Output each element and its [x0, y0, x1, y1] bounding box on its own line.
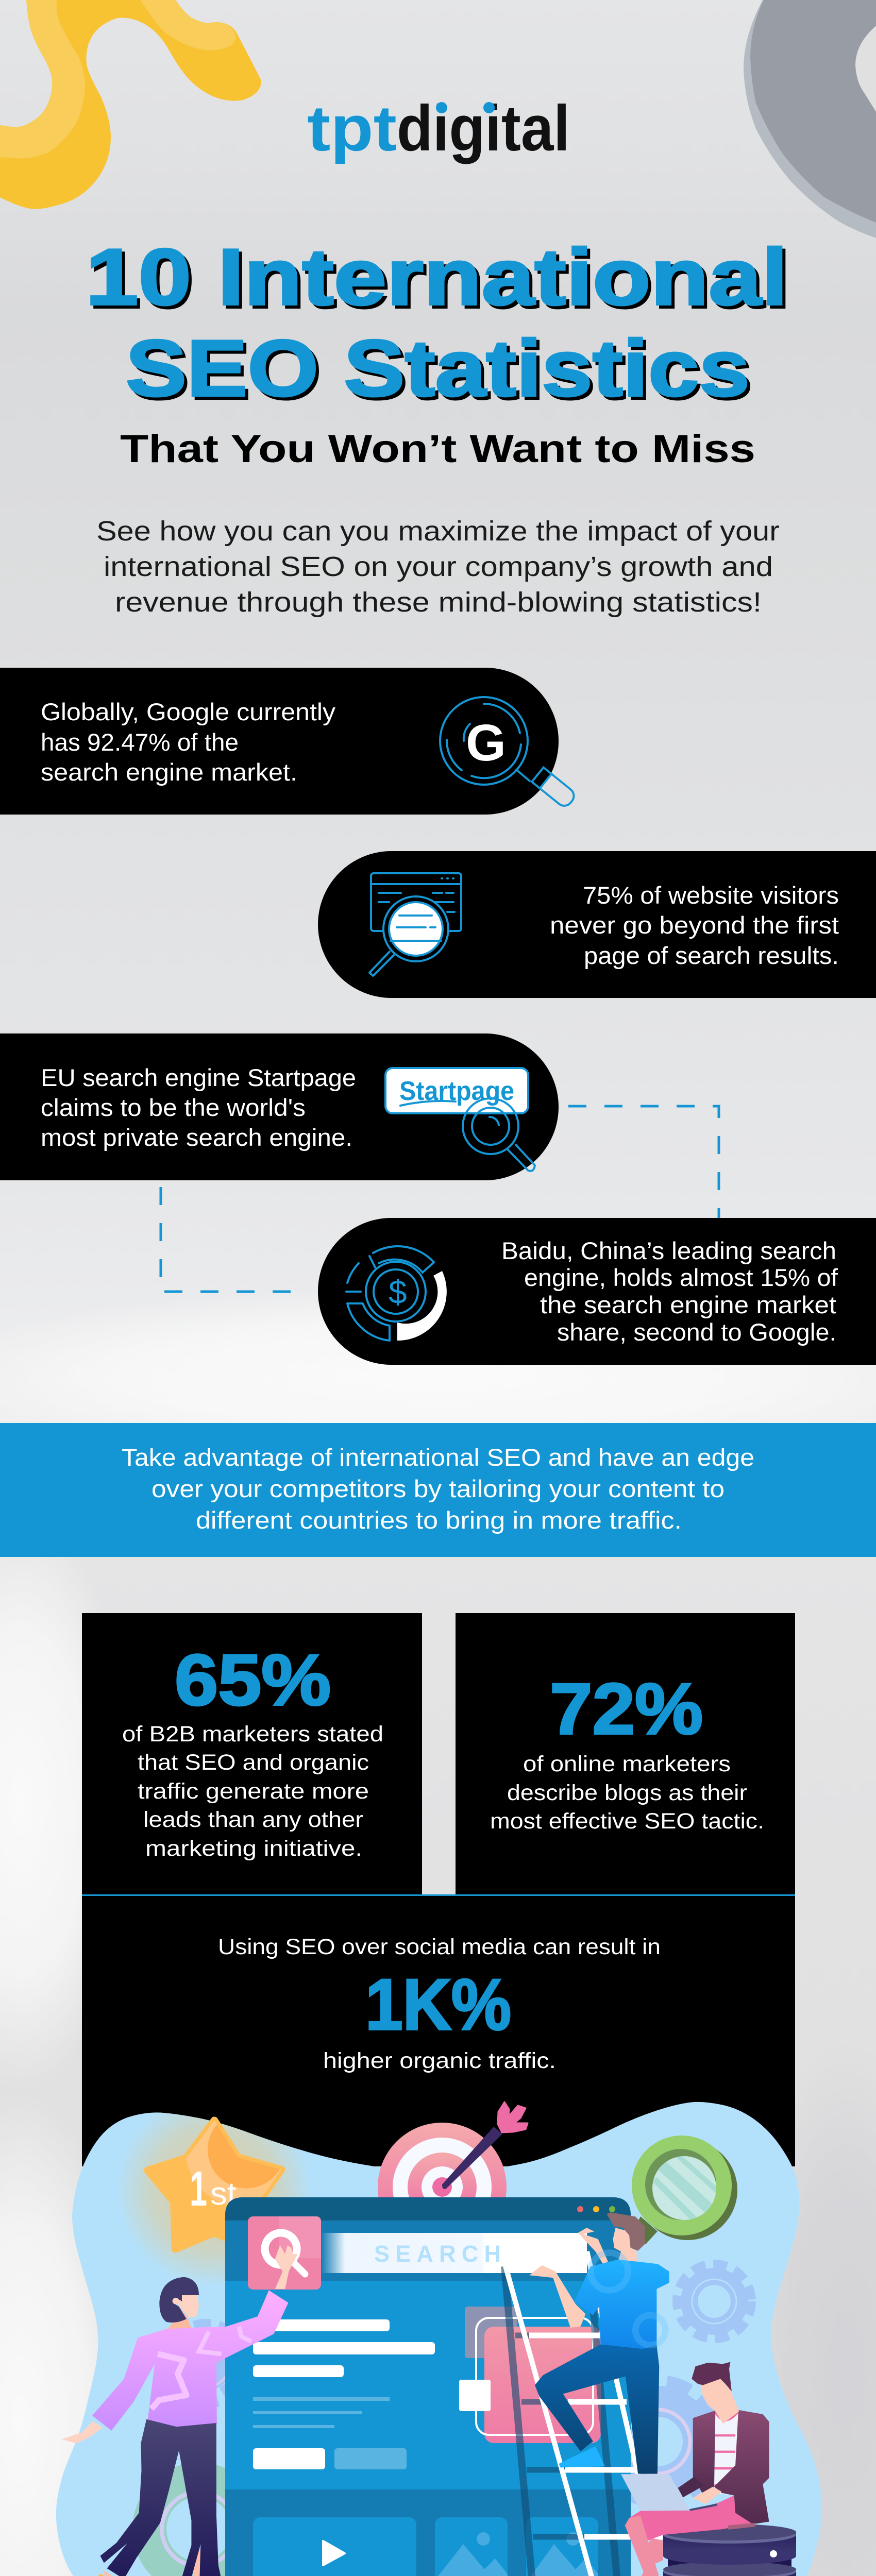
- text: Startpage stat: EU search engine Startpage: [41, 1064, 356, 1091]
- intro paragraph: See how you can you maximize the impact of your: [96, 516, 780, 547]
- blue banner: take advantage: over your competitors by tailoring your content to: [151, 1475, 725, 1502]
- title: SEO Statistics: [126, 324, 750, 413]
- star glow and star: [121, 2113, 307, 2282]
- search button: [248, 2216, 321, 2290]
- text: Google stat: [41, 698, 336, 786]
- text: 1st: st: [210, 2176, 237, 2212]
- subtitle: That You Won’t Want to Miss: [120, 427, 755, 471]
- logo: tptdigital: tpt: [307, 93, 397, 164]
- text: using SEO over social media: Using SEO over social media can result in: [218, 1935, 661, 1959]
- text: Baidu stat: the search engine market: [540, 1291, 836, 1318]
- text: Google stat: search engine market.: [41, 758, 297, 786]
- title: 10 International: [86, 232, 788, 321]
- text: Startpage stat: [41, 1064, 356, 1151]
- dashed connector left: [161, 1187, 309, 1292]
- database: [663, 2524, 796, 2576]
- video and image cards: [253, 2517, 598, 2576]
- intro paragraph: revenue through these mind-blowing statistics!: [115, 587, 762, 618]
- blue banner: take advantage: Take advantage of international SEO and have an edge: [122, 1444, 754, 1471]
- text: Startpage stat: claims to be the world's: [41, 1094, 306, 1121]
- person: standing man on ladder: [529, 2212, 669, 2474]
- icon: pie chart with dollar: [346, 1246, 447, 1341]
- text: first page stat: 75% of website visitors: [583, 882, 839, 909]
- dashed connector right: [568, 1106, 719, 1218]
- icon: magnifier with G: G: [466, 714, 506, 772]
- text: Startpage stat: most private search engine.: [41, 1124, 352, 1151]
- text: first page stat: [550, 882, 839, 969]
- person: woman touching search button: [61, 2245, 297, 2576]
- ladder: [502, 2251, 663, 2576]
- panel: 1K% stat: [82, 1894, 795, 2166]
- icon: pie chart with dollar: $: [389, 1274, 407, 1311]
- text: higher organic traffic: higher organic traffic.: [323, 2048, 556, 2073]
- text: B2B marketers: marketing initiative.: [145, 1836, 362, 1861]
- seated man body: [614, 2410, 769, 2576]
- gear: blue behind seated man: [631, 2376, 715, 2505]
- gear: blue behind woman: [193, 2319, 225, 2407]
- text: B2B marketers: that SEO and organic: [138, 1750, 369, 1775]
- icon: magnifier with G: [440, 697, 577, 809]
- logo: tptdigital: [307, 93, 570, 164]
- text: B2B marketers: traffic generate more: [138, 1779, 369, 1804]
- text: online marketers: most effective SEO tactic.: [490, 1809, 764, 1834]
- text: B2B marketers: [122, 1722, 383, 1861]
- icon: Startpage logo with magnifier: Startpage: [399, 1076, 514, 1106]
- text: online marketers: describe blogs as their: [507, 1781, 747, 1805]
- text: Baidu stat: share, second to Google.: [557, 1318, 836, 1346]
- blue banner: take advantage: [0, 1423, 876, 1557]
- target: [378, 2123, 507, 2197]
- blob background: [56, 2102, 822, 2576]
- illustration: search page with people: [56, 2088, 822, 2576]
- logo: tptdigital: digital: [397, 93, 570, 164]
- panel: Google market share: [0, 668, 577, 815]
- person: seated man on database: [614, 2362, 796, 2576]
- number: 72%: 72%: [550, 1668, 703, 1749]
- text: first page stat: never go beyond the first: [550, 911, 839, 939]
- decorative gray ring top-right: [744, 0, 876, 238]
- text: first page stat: page of search results.: [584, 942, 839, 969]
- magnifier: green: [632, 2136, 737, 2244]
- number: 1K%: 1K%: [365, 1964, 511, 2045]
- blue banner: take advantage: different countries to bring in more traffic.: [196, 1506, 682, 1534]
- gear: green lower left: [133, 2465, 225, 2576]
- panel: 65% stat: [82, 1613, 422, 1894]
- arrow in target: [442, 2102, 528, 2189]
- intro paragraph: [96, 516, 780, 618]
- panel: 72% stat: [456, 1613, 795, 1894]
- intro paragraph: international SEO on your company’s growth and: [104, 551, 773, 582]
- title: [86, 232, 788, 413]
- content bars: [253, 2319, 435, 2469]
- decorative yellow blob top-left: [0, 0, 261, 209]
- browser window: [225, 2197, 631, 2576]
- text: B2B marketers: of B2B marketers stated: [122, 1722, 383, 1747]
- text: B2B marketers: leads than any other: [143, 1807, 363, 1832]
- text: online marketers: of online marketers: [523, 1752, 731, 1776]
- panel: first page of search results: [318, 851, 876, 998]
- image panel on window: [459, 2307, 601, 2443]
- text: Baidu stat: engine, holds almost 15% of: [524, 1264, 838, 1291]
- panel: Startpage privacy: [0, 1033, 559, 1180]
- text: Google stat: has 92.47% of the: [41, 728, 239, 756]
- text: Google stat: Globally, Google currently: [41, 698, 336, 725]
- text: 1st: 1: [190, 2161, 207, 2216]
- panel: Baidu market share: [318, 1218, 876, 1365]
- search bar: [321, 2233, 587, 2273]
- text: Baidu stat: [501, 1237, 838, 1346]
- seated man head: [692, 2362, 739, 2424]
- icon: browser window with magnifier: [369, 873, 461, 976]
- text: online marketers: [490, 1752, 764, 1834]
- text: Baidu stat: Baidu, China’s leading search: [501, 1237, 836, 1264]
- number: 65%: 65%: [175, 1639, 331, 1720]
- search bar: SEARCH: [374, 2241, 501, 2267]
- gear: blue right: [678, 2265, 750, 2337]
- text: 1st: [192, 2172, 236, 2206]
- icon: Startpage logo with magnifier: [385, 1068, 535, 1171]
